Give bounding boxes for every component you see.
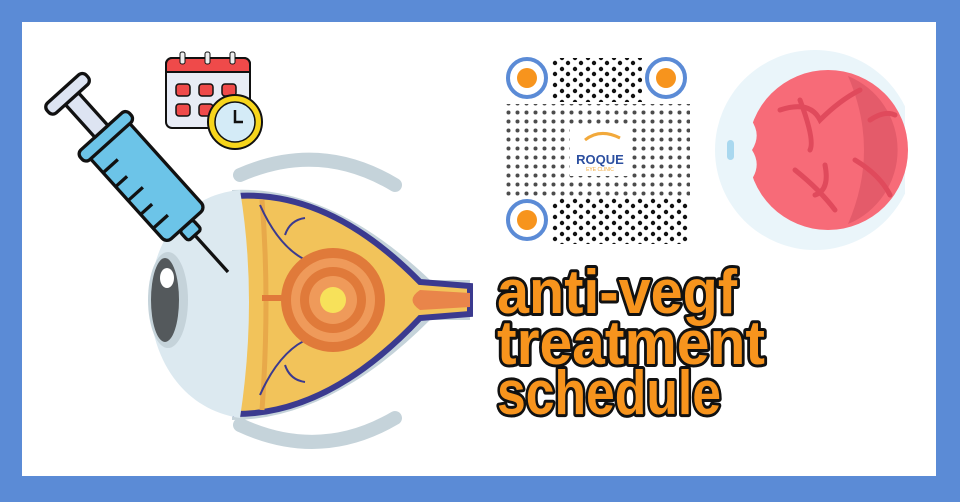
icon: red eyeball xyxy=(715,50,915,250)
title text: schedule xyxy=(497,359,721,428)
icon: syringe xyxy=(39,67,253,294)
logo: ROQUE xyxy=(576,152,624,167)
icon: eye cross-section xyxy=(148,160,470,442)
title text: treatment xyxy=(497,309,765,378)
logo: EYE CLINIC xyxy=(586,167,614,173)
icon: calendar with clock xyxy=(166,52,262,149)
title text xyxy=(497,258,765,428)
QR code xyxy=(505,58,690,244)
title text: anti-vegf xyxy=(497,258,737,327)
logo xyxy=(576,133,624,173)
